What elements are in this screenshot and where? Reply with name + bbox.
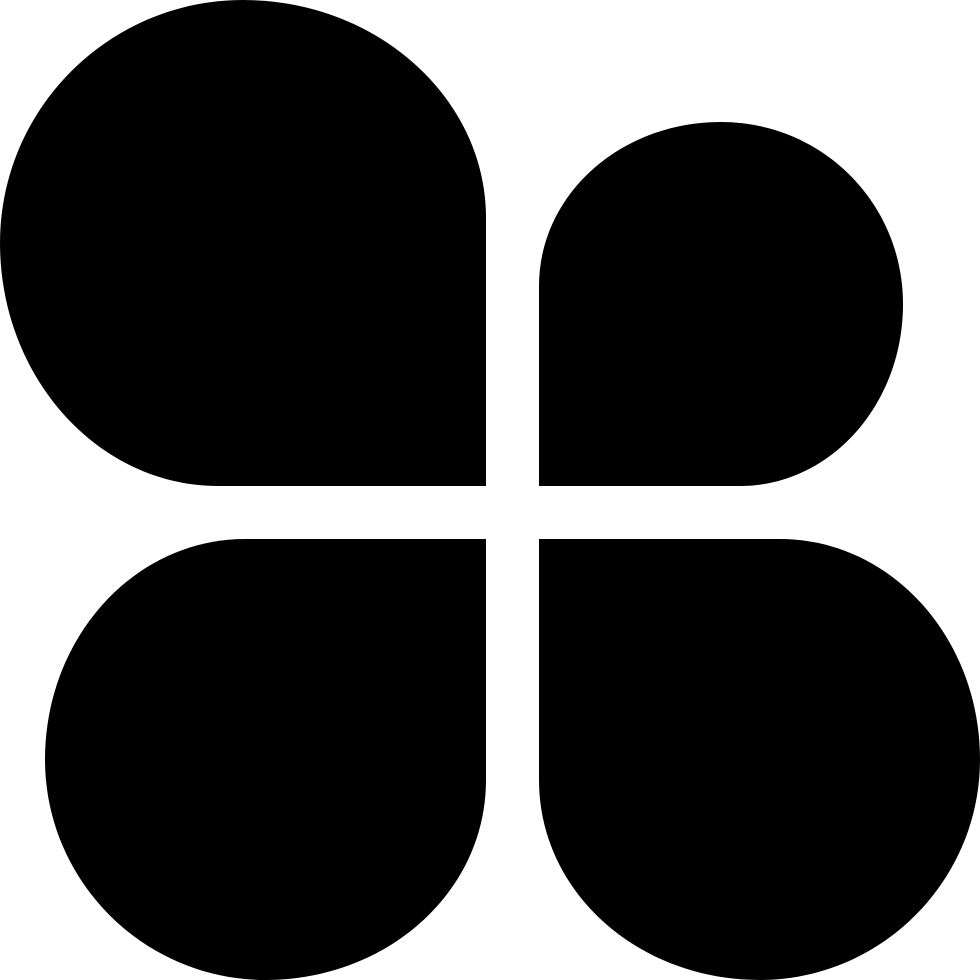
petal: bottom right: [539, 539, 980, 980]
petal: bottom left: [45, 539, 486, 980]
petal: top right: [539, 122, 903, 486]
petal: top left: [0, 0, 486, 486]
